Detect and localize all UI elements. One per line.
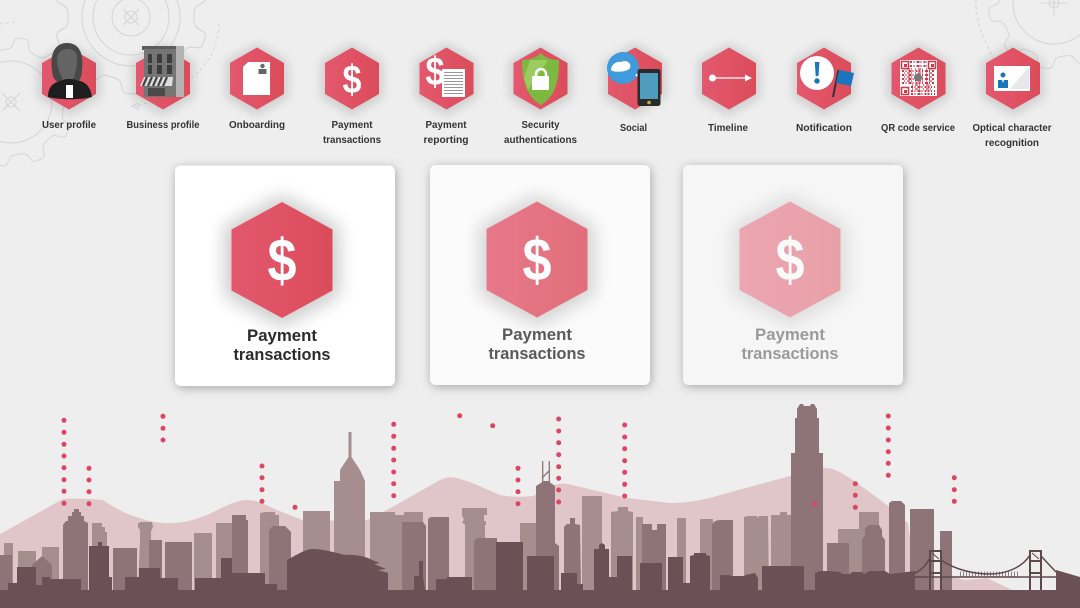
item: timeline: Timeline bbox=[708, 122, 748, 134]
card 3: payment transactions most faded: $ bbox=[776, 226, 804, 294]
front dark buildings bbox=[0, 542, 1080, 608]
mid-dark buildings bbox=[0, 404, 952, 590]
icon row bbox=[38, 43, 1052, 149]
item: qr code service bbox=[881, 44, 955, 134]
card 1: payment transactions: $ bbox=[268, 227, 296, 294]
bridge bbox=[915, 550, 1056, 590]
item: payment reporting bbox=[416, 44, 478, 146]
background gears bbox=[0, 0, 1080, 177]
item: security authentications bbox=[504, 44, 577, 146]
card 3: payment transactions most faded: transactions bbox=[742, 344, 838, 363]
card 1: payment transactions: transactions bbox=[234, 345, 330, 364]
item: onboarding: Onboarding bbox=[229, 119, 285, 131]
item: payment reporting: $ bbox=[426, 50, 444, 94]
item: qr code service: QR code service bbox=[881, 122, 955, 134]
item: payment reporting: reporting bbox=[424, 134, 468, 146]
item: optical character recognition bbox=[972, 44, 1052, 149]
card 3: payment transactions most faded: Payment bbox=[755, 325, 825, 344]
rising dots bbox=[62, 413, 957, 510]
skyline illustration bbox=[0, 404, 1080, 608]
card 1: payment transactions bbox=[175, 166, 395, 386]
item: onboarding bbox=[226, 44, 288, 131]
item: notification bbox=[793, 44, 855, 134]
item: notification: Notification bbox=[796, 122, 852, 134]
item: user profile: User profile bbox=[42, 119, 96, 131]
item: security authentications: Security bbox=[522, 119, 560, 131]
card 2: payment transactions faded: Payment bbox=[502, 325, 572, 344]
item: payment transactions: transactions bbox=[323, 134, 381, 146]
item: timeline bbox=[698, 44, 760, 134]
mountains bbox=[0, 468, 917, 590]
card 1: payment transactions: Payment bbox=[247, 326, 317, 345]
item: payment transactions: $ bbox=[342, 58, 362, 102]
item: user profile bbox=[38, 43, 100, 131]
card 3: payment transactions most faded bbox=[683, 165, 903, 385]
card 2: payment transactions faded: $ bbox=[522, 226, 552, 294]
item: payment transactions: Payment bbox=[332, 119, 373, 131]
item: social: Social bbox=[620, 122, 647, 134]
item: security authentications: authentications bbox=[504, 134, 577, 146]
mid buildings bbox=[4, 432, 879, 590]
item: optical character recognition: Optical character bbox=[972, 122, 1052, 134]
item: optical character recognition: recognition bbox=[985, 137, 1039, 149]
card 2: payment transactions faded: transactions bbox=[488, 344, 586, 363]
item: business profile: Business profile bbox=[126, 119, 200, 131]
item: payment reporting: Payment bbox=[426, 119, 467, 131]
item: business profile bbox=[126, 44, 200, 131]
card 2: payment transactions faded bbox=[430, 165, 650, 385]
item: social bbox=[604, 44, 666, 134]
item: payment transactions bbox=[321, 44, 383, 146]
